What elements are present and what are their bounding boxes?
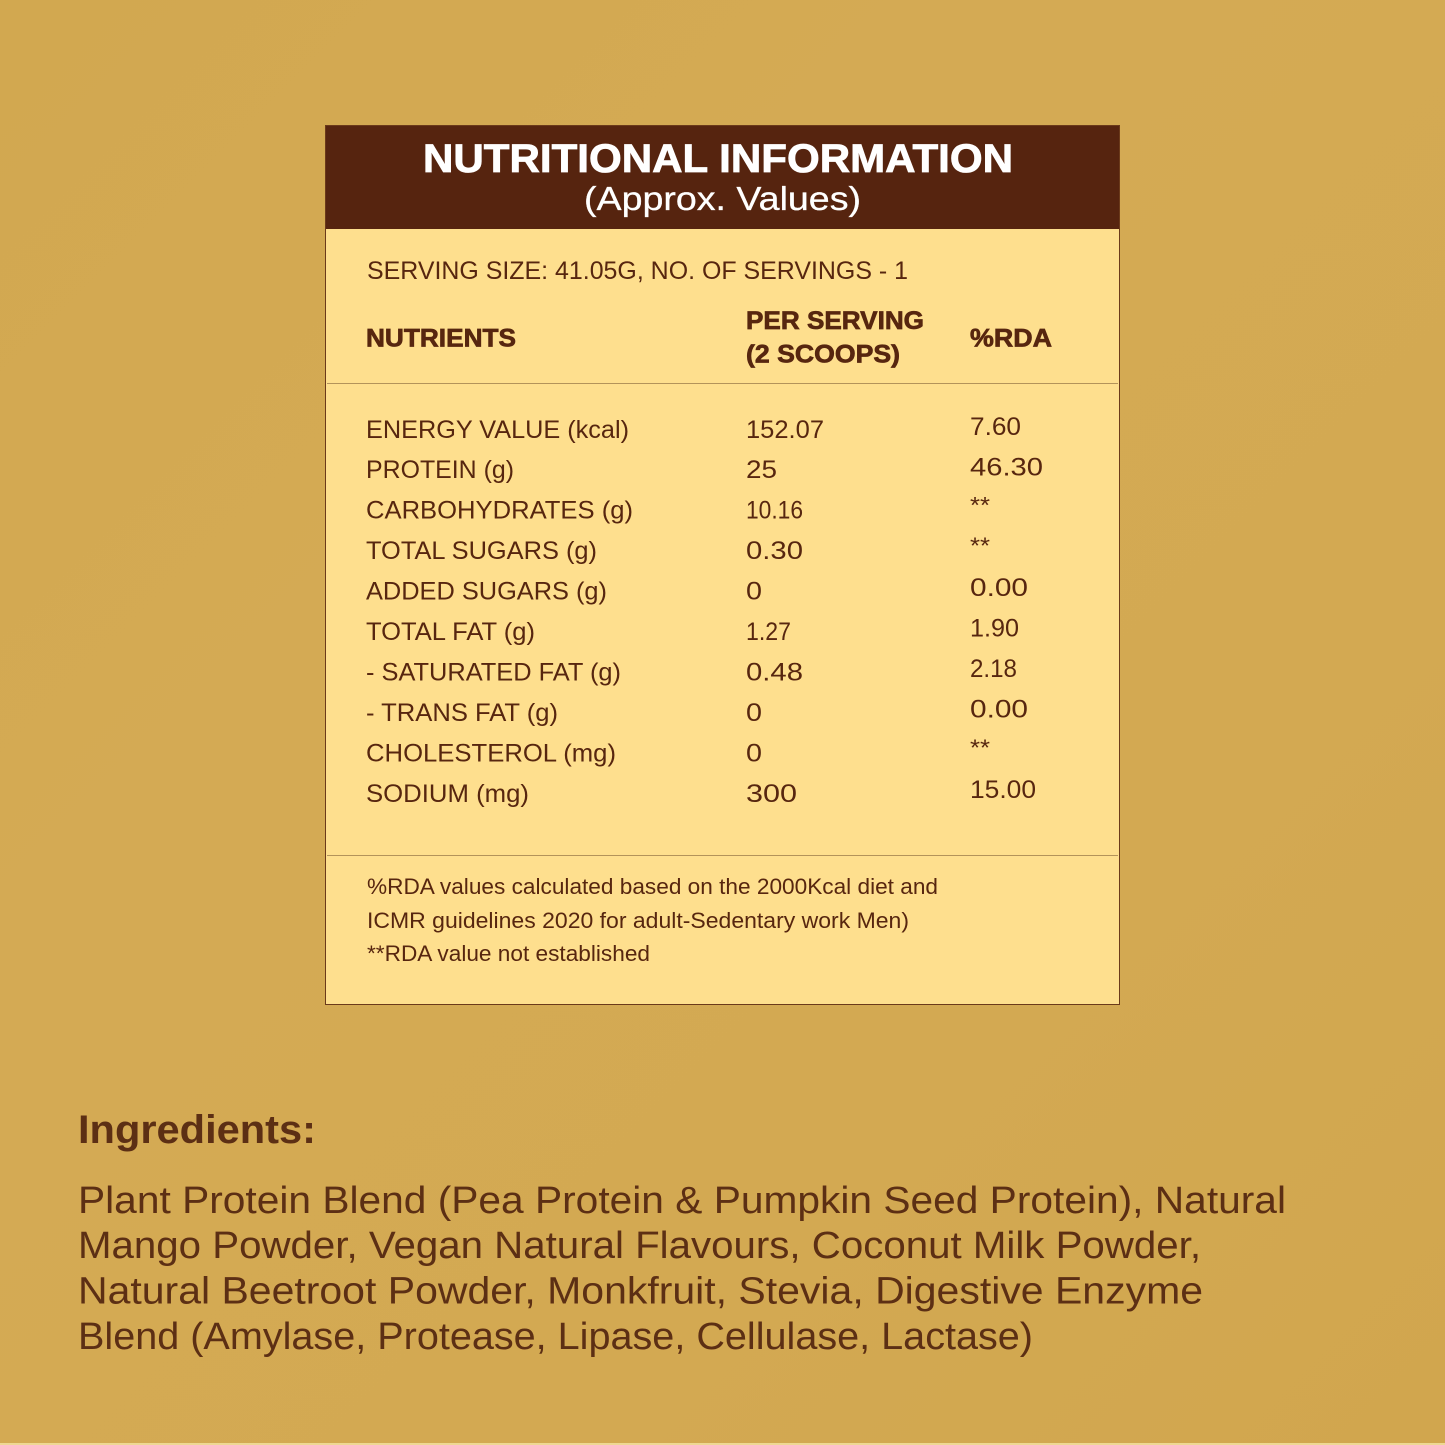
ingredients list: Mango Powder, Vegan Natural Flavours, Coconut Milk Powder,	[78, 1225, 1201, 1267]
footnote: %RDA values calculated based on the 2000Kcal diet and	[367, 874, 938, 899]
per serving column: 0.30	[746, 537, 803, 565]
percent RDA column: **	[970, 734, 990, 760]
nutrient names column	[366, 416, 633, 808]
footnote: **RDA value not established	[367, 941, 650, 966]
percent RDA column: 0.00	[970, 696, 1028, 724]
nutrient names column: SODIUM (mg)	[366, 780, 529, 808]
percent RDA column: 0.00	[970, 574, 1028, 602]
panel: nutrition table	[326, 126, 1120, 1004]
per serving column: 25	[746, 456, 777, 484]
per serving column: 300	[746, 780, 797, 808]
nutrient names column: TOTAL SUGARS (g)	[366, 537, 597, 565]
per serving column: 0.48	[746, 658, 803, 686]
percent RDA column: **	[970, 492, 990, 518]
nutrient names column: - TRANS FAT (g)	[366, 699, 558, 727]
nutrient names column: CHOLESTEROL (mg)	[366, 740, 616, 768]
percent RDA column	[970, 413, 1043, 804]
footnote	[367, 874, 938, 966]
percent RDA column: 1.90	[970, 614, 1019, 642]
table column headings: %RDA	[970, 324, 1052, 352]
per serving column	[746, 416, 824, 808]
percent RDA column: 15.00	[970, 776, 1036, 804]
per serving column: 152.07	[746, 416, 824, 444]
ingredients list: Plant Protein Blend (Pea Protein & Pumpkin Seed Protein), Natural	[78, 1180, 1286, 1222]
panel background	[326, 126, 1120, 1004]
table column headings: (2 SCOOPS)	[746, 340, 900, 368]
per serving column: 1.27	[746, 618, 791, 646]
ingredients list: Blend (Amylase, Protease, Lipase, Cellulase, Lactase)	[78, 1316, 1033, 1358]
per serving column: 10.16	[746, 496, 803, 524]
nutrient names column: TOTAL FAT (g)	[366, 618, 535, 646]
serving size: SERVING SIZE: 41.05G, NO. OF SERVINGS - 1	[367, 257, 908, 285]
nutrient names column: CARBOHYDRATES (g)	[366, 496, 633, 524]
table column headings	[366, 307, 1052, 368]
nutrient names column: ENERGY VALUE (kcal)	[366, 416, 629, 444]
subtitle: (Approx. Values)	[584, 180, 861, 217]
percent RDA column: 7.60	[970, 413, 1021, 441]
ingredients list: Natural Beetroot Powder, Monkfruit, Stevia, Digestive Enzyme	[78, 1270, 1203, 1312]
table column headings: PER SERVING	[746, 307, 924, 335]
per serving column: 0	[746, 699, 762, 727]
nutrient names column: ADDED SUGARS (g)	[366, 578, 607, 606]
per serving column: 0	[746, 578, 762, 606]
table column headings: NUTRIENTS	[366, 324, 516, 352]
title: NUTRITIONAL INFORMATION	[423, 137, 1013, 181]
ingredients heading: Ingredients:	[78, 1108, 316, 1152]
nutrient names column: PROTEIN (g)	[366, 456, 514, 484]
per serving column: 0	[746, 740, 762, 768]
nutrient names column: - SATURATED FAT (g)	[366, 658, 621, 686]
footnote: ICMR guidelines 2020 for adult-Sedentary work Men)	[367, 908, 909, 933]
ingredients list	[78, 1180, 1286, 1358]
header band	[326, 126, 1119, 229]
percent RDA column: 46.30	[970, 454, 1043, 482]
percent RDA column: 2.18	[970, 655, 1017, 683]
percent RDA column: **	[970, 532, 990, 558]
